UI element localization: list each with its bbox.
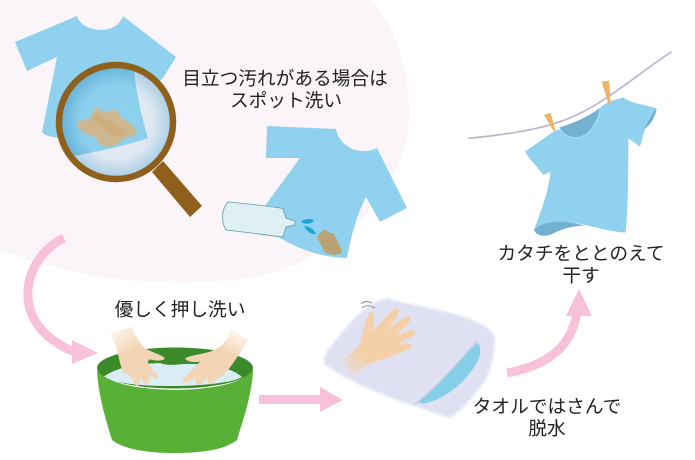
tub inside [97, 348, 253, 388]
panel: pink background blob [0, 0, 409, 283]
icon: hanging t-shirt [525, 81, 657, 236]
text: reshape and dry [497, 243, 665, 286]
arrow: pink curved arrow to tub [28, 238, 98, 364]
icon: stained t-shirt under magnifier [15, 16, 176, 140]
icon: detergent bottle [222, 202, 316, 237]
magnifier handle [152, 161, 202, 217]
stain [76, 108, 137, 147]
magnifier lens [50, 60, 173, 179]
clothespin left [544, 113, 555, 131]
towel [324, 298, 495, 418]
text: reshape and dry: 干す [562, 265, 600, 286]
icon: green wash tub with hands [97, 327, 253, 453]
icon: clothesline [468, 52, 672, 138]
shirt back collar [559, 108, 599, 138]
text: towel dewatering: タオルではさんで [473, 396, 621, 417]
collar band [561, 109, 601, 138]
arrow: pink curved arrow to hanging shirt [507, 289, 592, 373]
text: reshape and dry: カタチをととのえて [497, 243, 665, 264]
clothespin right [602, 81, 611, 103]
arrow: pink arrow to towel [259, 387, 343, 412]
left hand [110, 327, 165, 386]
sleeve shade [644, 108, 657, 129]
icon: magnifying glass [50, 60, 202, 217]
text: spot wash heading [182, 68, 388, 111]
hem shade [534, 222, 585, 236]
icon: towel with hand pressing [324, 298, 495, 418]
detergent drops [301, 219, 316, 234]
shirt body [525, 97, 657, 233]
text: towel dewatering: 脱水 [528, 418, 566, 439]
pressing hand [342, 308, 415, 376]
text: spot wash heading: 目立つ汚れがある場合は [182, 68, 388, 89]
motion lines [361, 302, 375, 308]
water [103, 363, 242, 386]
text: gentle press wash: 優しく押し洗い [115, 299, 245, 320]
text: towel dewatering [473, 396, 621, 439]
stain [317, 229, 342, 255]
shirt inside towel [418, 343, 480, 403]
tub body [97, 370, 253, 453]
right hand [182, 330, 248, 385]
icon: t-shirt with stain [264, 126, 407, 258]
text: spot wash heading: スポット洗い [230, 90, 342, 111]
